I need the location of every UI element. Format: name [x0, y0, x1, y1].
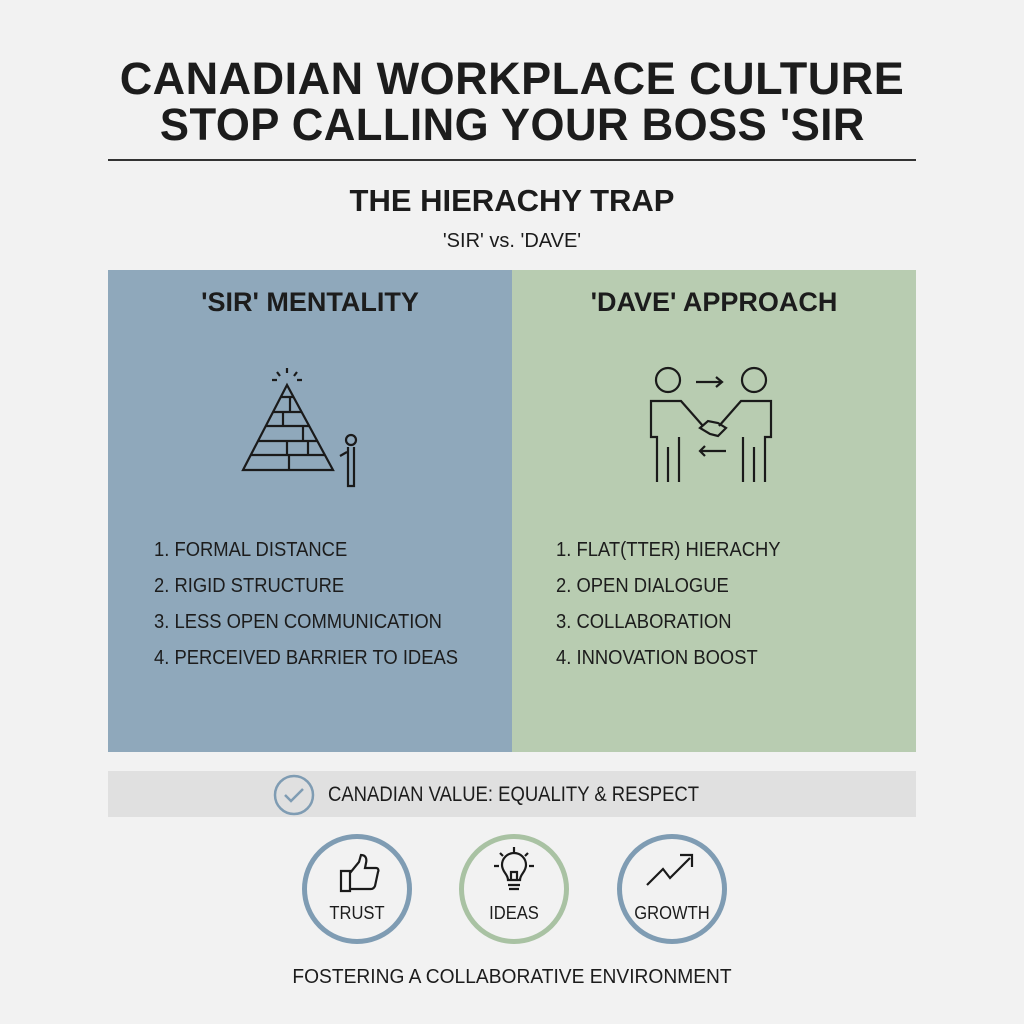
- list: dave: 3. COLLABORATION: [556, 611, 732, 633]
- icon: pyramid: [241, 368, 358, 488]
- list: sir: 2. RIGID STRUCTURE: [154, 575, 344, 597]
- footer: FOSTERING A COLLABORATIVE ENVIRONMENT: [292, 966, 732, 988]
- icon: check: [274, 774, 314, 816]
- panel: sir mentality: [108, 270, 512, 752]
- list: sir: 3. LESS OPEN COMMUNICATION: [154, 611, 442, 633]
- list: sir: 1. FORMAL DISTANCE: [154, 539, 347, 561]
- panel: dave approach: [512, 270, 916, 752]
- circle: ideas: [459, 834, 569, 944]
- heading: sir: 'SIR' MENTALITY: [201, 287, 419, 317]
- sub-subtitle: 'SIR' vs. 'DAVE': [443, 230, 581, 252]
- circle: growth: [617, 834, 727, 944]
- title: [120, 53, 904, 150]
- circle: trust: TRUST: [329, 903, 385, 923]
- circle: trust: [302, 834, 412, 944]
- subtitle: THE HIERACHY TRAP: [350, 183, 674, 218]
- circle: growth: GROWTH: [634, 903, 710, 923]
- title: CANADIAN WORKPLACE CULTURE: [120, 53, 904, 104]
- list: sir: 4. PERCEIVED BARRIER TO IDEAS: [154, 647, 458, 669]
- list: dave: 1. FLAT(TTER) HIERACHY: [556, 539, 781, 561]
- list: dave: [556, 539, 781, 669]
- banner: canadian value: [108, 771, 916, 817]
- icon: handshake: [650, 366, 772, 482]
- title: STOP CALLING YOUR BOSS 'SIR: [159, 99, 865, 150]
- heading: dave: 'DAVE' APPROACH: [591, 287, 837, 317]
- circle: ideas: IDEAS: [489, 903, 539, 923]
- banner: canadian value: CANADIAN VALUE: EQUALITY & RESPECT: [328, 783, 699, 806]
- list: sir: [154, 539, 458, 669]
- list: dave: 2. OPEN DIALOGUE: [556, 575, 729, 597]
- list: dave: 4. INNOVATION BOOST: [556, 647, 758, 669]
